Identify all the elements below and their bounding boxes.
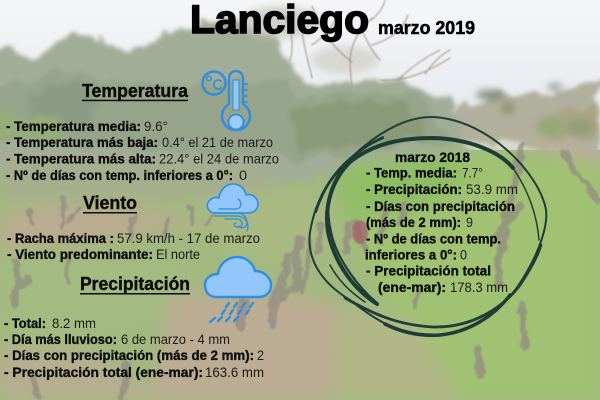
text: racha máxima: 57.9 km/h - 17 de marzo [117,230,260,246]
text: precipitación total: (ene-mar): [378,279,446,295]
text: días con temperaturas inferiores: 0 [460,246,467,262]
text: precipitación: 53.9 mm [466,181,518,197]
text: temperatura más alta: 22.4° el 24 de marzo [159,150,279,166]
text: días con temperaturas inferiores [365,230,501,262]
heading: viento: Viento [83,193,137,213]
text: precipitación total: 178.3 mm [450,279,508,295]
text: temperatura media: - Temperatura media: [6,118,141,134]
vine stumps [14,146,598,398]
icon: thermometer [202,71,250,130]
text: racha máxima: - Racha máxima : [7,230,114,246]
ground patches [0,142,600,400]
text: temperatura más alta [6,150,279,166]
text: días con precipitación: (más de 2 mm): [366,214,461,230]
icon: wind cloud [207,184,258,231]
text: total: 8.2 mm [52,315,96,331]
text: precipitación [366,181,518,197]
text: días con precipitación: - Días con precipitación (más de 2 mm): [4,347,254,363]
text: días con precipitación: - Días con precipitación [366,198,515,214]
panel: precipitación [4,257,271,380]
text: temp. media: 7.7° [462,164,483,180]
text: temperatura más alta: - Temperatura más alta: [6,150,156,166]
text: temperatura más baja: - Temperatura más baja: [6,134,158,150]
text: temperatura más baja [6,134,273,150]
olive trees [0,18,470,180]
subtitle: date: marzo 2019 [378,18,475,38]
heading: temperatura: Temperatura [82,81,189,101]
text: día más lluvioso: - Día más lluvioso: [4,331,117,347]
text: días con temperaturas inferiores: inferiores a 0°: [365,246,457,262]
bare tree branches [286,0,450,84]
heading: marzo 2018: marzo 2018 [395,149,470,165]
text: precipitación total: 163.6 mm [205,364,264,380]
text: días con precipitación: 2 [257,347,264,363]
text: viento predominante: - Viento predominante: [7,246,153,262]
text: días con precipitación: 9 [466,214,473,230]
upper tree haze [240,6,379,74]
text: precipitación total [366,262,508,295]
text: viento predominante: El norte [156,246,200,262]
text: día más lluvioso [4,331,230,347]
scribbled circle around comparison [309,117,546,336]
text: racha máxima [7,230,260,246]
heading: precipitación: Precipitación [80,274,190,294]
text: días con temperaturas inferiores: - Nº de días con temp. inferiores a 0°: [6,167,233,183]
text: días con temperaturas inferiores: - Nº de días con temp. [366,230,501,246]
panel: viento [7,184,260,262]
text: día más lluvioso: 6 de marzo - 4 mm [121,331,230,347]
grass base [0,150,600,400]
text: días con temperaturas inferiores: 0 [239,167,247,183]
text: precipitación total: - Precipitación total [366,262,491,278]
text: temperatura media: 9.6° [144,118,168,134]
text: precipitación total: - Precipitación total (ene-mar): [4,364,203,380]
icon: rain cloud [205,257,271,322]
text: precipitación: - Precipitación: [366,181,462,197]
text: total: - Total: [4,315,46,331]
panel: temperatura [6,71,279,183]
text: temp. media: - Temp. media: [366,164,457,180]
text: temperatura más baja: 0.4° el 21 de marzo [162,134,273,150]
distant hills [450,78,600,165]
text: días con precipitación [366,198,515,230]
panel: marzo 2018 comparison [365,149,518,295]
text: total [4,315,96,331]
